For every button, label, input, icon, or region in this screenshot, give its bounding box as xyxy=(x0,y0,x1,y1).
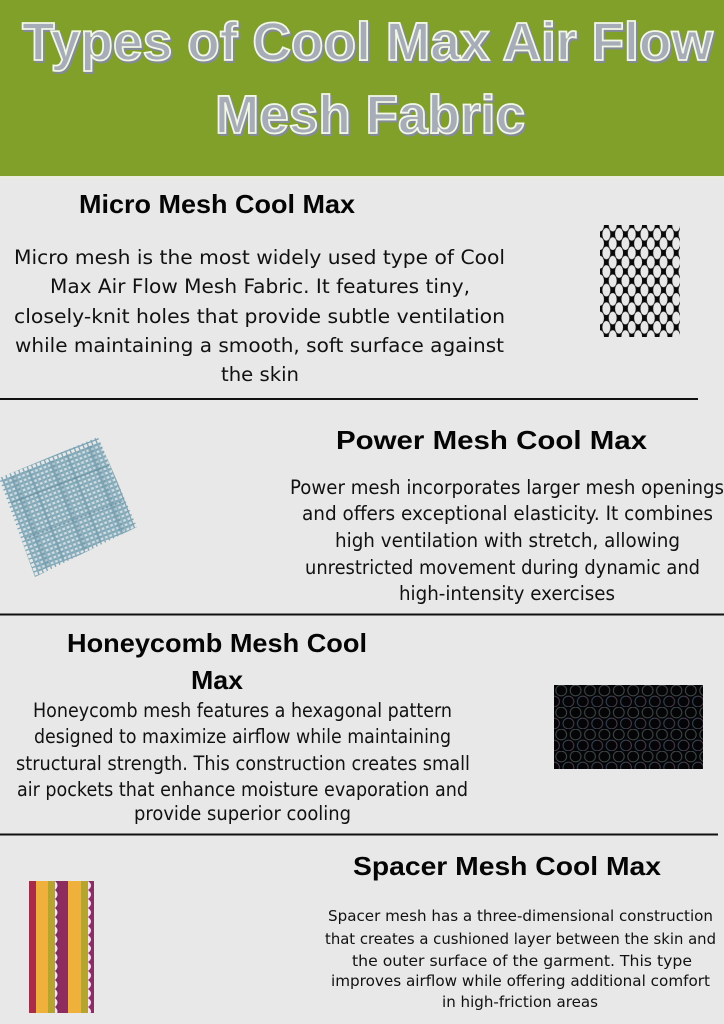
icon: micro mesh swatch xyxy=(600,225,680,337)
icon: spacer swatch xyxy=(29,881,94,1013)
heading: honeycomb mesh: Honeycomb Mesh Cool xyxy=(67,628,367,658)
text: micro mesh description: closely-knit holes that provide subtle ventilation xyxy=(14,305,505,328)
text: micro mesh description: Max Air Flow Mesh Fabric. It features tiny, xyxy=(50,275,470,298)
heading: micro mesh: Micro Mesh Cool Max xyxy=(79,189,356,219)
text: power mesh description: high-intensity exercises xyxy=(399,582,615,605)
icon: power mesh swatch xyxy=(0,437,137,577)
text: micro mesh description: Micro mesh is the most widely used type of Cool xyxy=(14,246,505,269)
title xyxy=(22,12,716,147)
text: power mesh description: unrestricted movement during dynamic and xyxy=(305,556,700,579)
title: Types of Cool Max Air Flow xyxy=(24,14,716,74)
panel: honeycomb mesh xyxy=(16,628,703,825)
text: spacer mesh description: in high-friction areas xyxy=(442,993,598,1011)
heading: spacer mesh: Spacer Mesh Cool Max xyxy=(353,851,662,881)
title banner xyxy=(0,0,724,179)
text: power mesh description: high ventilation with stretch, allowing xyxy=(335,529,680,552)
heading: power mesh: Power Mesh Cool Max xyxy=(336,425,648,455)
text: spacer mesh description: that creates a cushioned layer between the skin and xyxy=(325,930,716,948)
text: spacer mesh description: improves airflow while offering additional comfort xyxy=(331,972,710,990)
panel: spacer mesh xyxy=(29,851,716,1013)
text: honeycomb mesh description: air pockets that enhance moisture evaporation and xyxy=(17,778,468,801)
text: micro mesh description xyxy=(14,246,505,386)
text: honeycomb mesh description: Honeycomb mesh features a hexagonal pattern xyxy=(33,699,452,722)
text: honeycomb mesh description: structural strength. This construction creates small xyxy=(16,752,470,775)
text: spacer mesh description: Spacer mesh has a three-dimensional construction xyxy=(328,907,713,925)
text: spacer mesh description xyxy=(325,907,716,1011)
icon: honeycomb swatch xyxy=(554,685,703,769)
text: spacer mesh description: the outer surface of the garment. This type xyxy=(352,952,692,970)
text: honeycomb mesh description xyxy=(16,699,470,825)
heading: honeycomb mesh xyxy=(67,628,367,695)
title: Types of Cool Max Air Flow xyxy=(22,12,714,72)
panel: power mesh xyxy=(0,425,724,605)
title: Mesh Fabric xyxy=(215,85,525,145)
text: honeycomb mesh description: provide superior cooling xyxy=(134,802,351,825)
text: micro mesh description: while maintaining a smooth, soft surface against xyxy=(15,334,504,357)
text: micro mesh description: the skin xyxy=(221,363,299,386)
text: honeycomb mesh description: designed to maximize airflow while maintaining xyxy=(34,725,451,748)
panel: micro mesh xyxy=(14,189,680,386)
title: Mesh Fabric xyxy=(217,87,527,147)
text: power mesh description: and offers exceptional elasticity. It combines xyxy=(302,502,713,525)
heading: honeycomb mesh: Max xyxy=(191,665,244,695)
text: power mesh description xyxy=(290,476,724,605)
